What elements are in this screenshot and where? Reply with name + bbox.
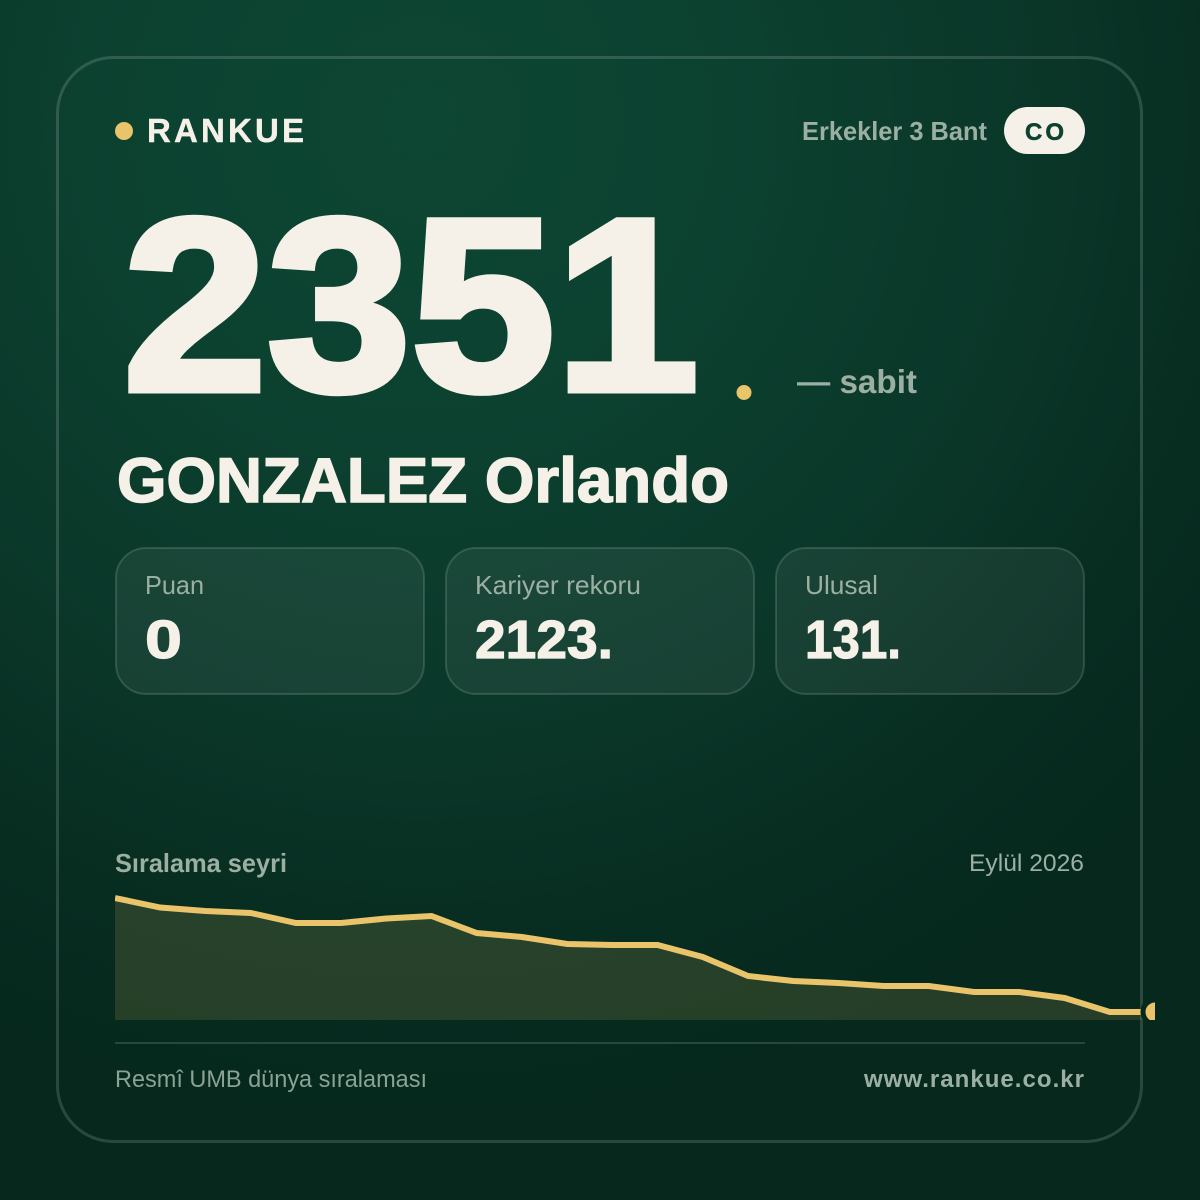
value: 2123. [475,610,613,670]
label: Ulusal [805,570,878,600]
country badge: CO [1025,119,1064,146]
category and country [802,107,1085,154]
line chart [115,898,1167,1024]
footer website: www.rankue.co.kr [863,1066,1084,1093]
chart line [115,898,1155,1012]
label: Puan [145,570,204,600]
value: 131. [805,610,901,670]
panel: career record [446,548,754,694]
panel: points [116,548,424,694]
country badge [1004,107,1085,154]
category label: Erkekler 3 Bant [802,116,987,146]
player name: GONZALEZ Orlando [117,446,729,516]
trend label: — sabit [797,363,917,400]
brand logo [115,112,304,149]
icon: accent dot [736,385,752,400]
label: Kariyer rekoru [475,570,641,600]
footer source: Resmî UMB dünya sıralaması [115,1066,427,1093]
icon: brand dot [115,122,133,140]
chart heading: Sıralama seyri [115,848,287,878]
brand name: RANKUE [147,112,304,149]
panel: national rank [776,548,1084,694]
chart end marker [1140,1002,1155,1020]
chart area [115,898,1155,1020]
chart date: Eylül 2026 [969,850,1084,877]
rating number: 2351 [123,168,699,443]
value: 0 [145,610,182,670]
